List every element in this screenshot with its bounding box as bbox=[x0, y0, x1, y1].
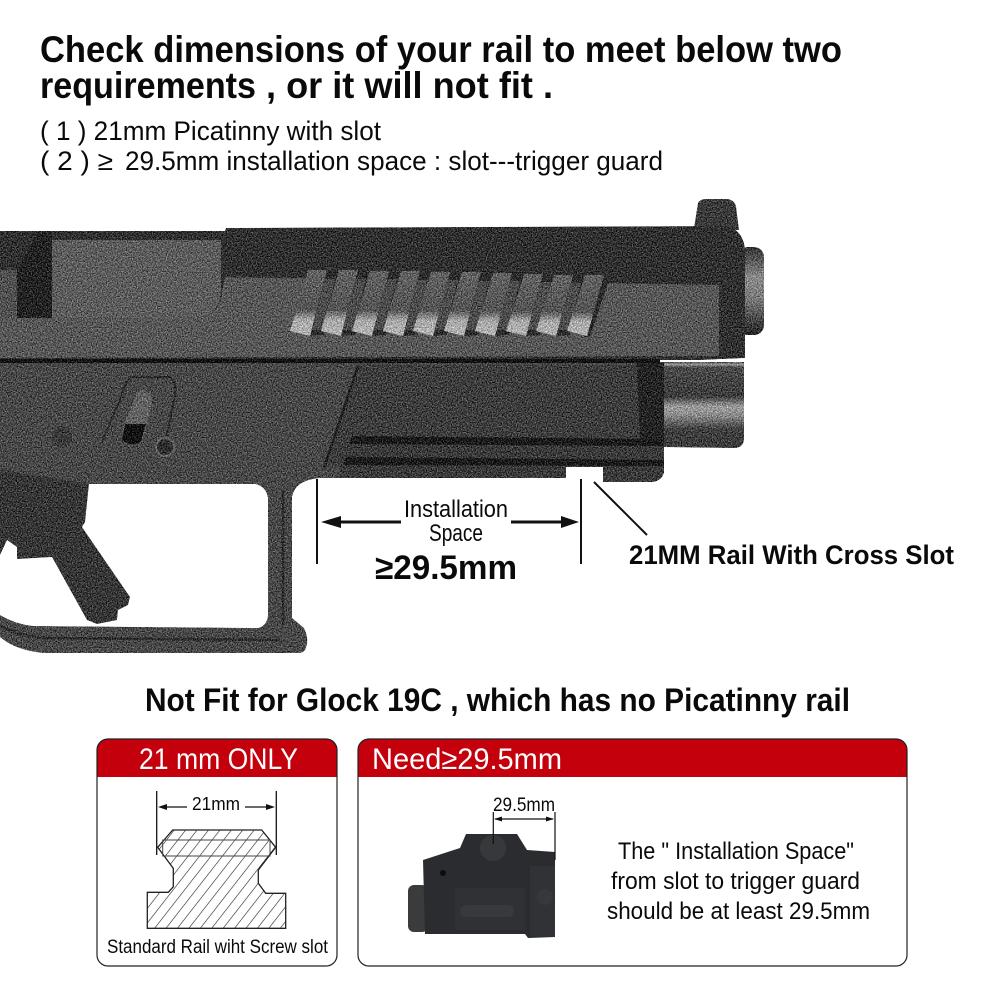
rail cross-section bbox=[147, 830, 286, 928]
muzzle bbox=[738, 247, 764, 335]
panel: 21 mm only bbox=[97, 739, 337, 966]
installation note: from slot to trigger guard bbox=[611, 868, 860, 895]
slide frame seam bbox=[0, 359, 660, 363]
compatibility heading: Not Fit for Glock 19C , which has no Picatinny rail bbox=[145, 682, 850, 718]
installation space dimension: Installation bbox=[404, 496, 508, 523]
installation note: The " Installation Space" bbox=[618, 838, 854, 865]
frame and trigger guard bbox=[0, 362, 664, 653]
trigger bbox=[0, 470, 130, 624]
serrations bbox=[290, 270, 610, 337]
panel heading: 21 mm ONLY bbox=[139, 743, 298, 776]
installation note: should be at least 29.5mm bbox=[607, 898, 870, 925]
requirements list: ( 1 ) 21mm Picatinny with slot bbox=[40, 116, 381, 146]
title: Check dimensions of your rail to meet below two bbox=[40, 29, 842, 70]
panel heading: Need≥29.5mm bbox=[372, 743, 562, 776]
front sight bbox=[694, 199, 739, 230]
slide bbox=[0, 226, 745, 361]
barrel bbox=[660, 362, 744, 448]
installation space dimension bbox=[317, 479, 581, 587]
rail callout bbox=[594, 482, 954, 570]
panel: need 29.5mm bbox=[358, 739, 907, 966]
slide lower lighter band bbox=[0, 277, 719, 358]
title bbox=[40, 29, 842, 106]
rear notch bbox=[0, 270, 17, 318]
installation note bbox=[607, 838, 870, 925]
right arrow bbox=[511, 516, 579, 528]
title: , or it will not fit . bbox=[266, 65, 553, 106]
left arrow bbox=[321, 516, 401, 528]
requirements list bbox=[40, 116, 663, 176]
rail bbox=[340, 436, 664, 482]
29.5mm dimension bbox=[493, 795, 555, 860]
frame seam bbox=[324, 366, 358, 468]
requirements list: ( 2 ) ≥ bbox=[40, 146, 113, 176]
rail callout: 21MM Rail With Cross Slot bbox=[629, 540, 954, 570]
pistol photo bbox=[0, 199, 764, 653]
installation space dimension: ≥29.5mm bbox=[375, 549, 517, 587]
title: requirements bbox=[40, 65, 256, 106]
dust cover bbox=[325, 365, 664, 467]
guard shading bbox=[0, 490, 283, 640]
21mm dimension: 21mm bbox=[192, 794, 240, 814]
21mm dimension bbox=[157, 791, 276, 855]
icon: weapon light bbox=[408, 834, 555, 938]
ejection port bbox=[52, 240, 221, 318]
takedown lever bbox=[52, 377, 175, 456]
29.5mm dimension: 29.5mm bbox=[493, 795, 555, 816]
rail caption: Standard Rail wiht Screw slot bbox=[107, 937, 329, 958]
requirements list: 29.5mm installation space : slot---trigger guard bbox=[125, 146, 663, 176]
installation space dimension: Space bbox=[429, 520, 483, 547]
